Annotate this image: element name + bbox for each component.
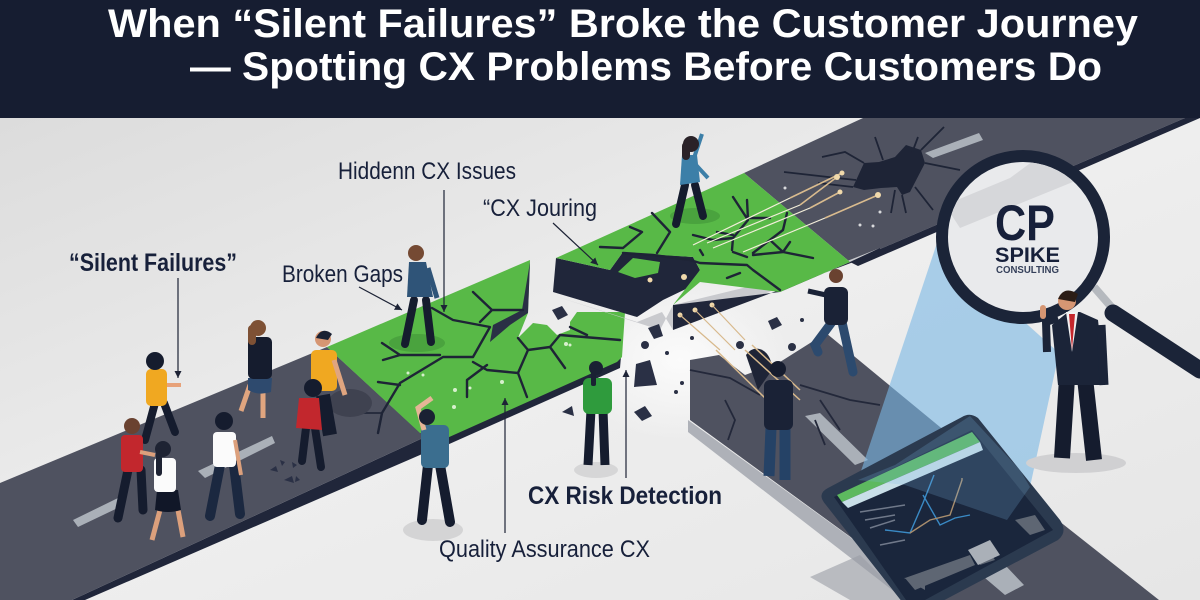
label: Quality Assurance CX: Quality Assurance CX	[439, 536, 650, 563]
person: white top navy trousers	[210, 412, 241, 516]
label: CX Jouring: “CX Jouring	[483, 195, 597, 222]
person: suited man	[1026, 290, 1126, 473]
logo text CP: CP	[995, 195, 1055, 251]
title line 1: When “Silent Failures” Broke the Customer Journey	[108, 2, 1139, 46]
road: left section	[0, 347, 450, 600]
tablet header bar	[837, 432, 980, 502]
logo text CONSULTING: CONSULTING	[996, 265, 1059, 276]
person: navy climbing	[808, 269, 853, 372]
label: CX Jouring	[483, 195, 598, 265]
logo text SPIKE: SPIKE	[995, 244, 1060, 267]
person: yellow shirt walker	[145, 352, 181, 440]
person: navy jacket on green	[389, 245, 445, 352]
road: lower right section	[688, 333, 1159, 600]
person: yellow shirt black trousers	[311, 331, 345, 435]
tablet	[810, 415, 1064, 600]
label: Hiddenn CX Issues: Hiddenn CX Issues	[338, 158, 516, 185]
label: Silent Failures: “Silent Failures”	[69, 249, 237, 277]
tablet chart	[885, 475, 970, 533]
dashboard beam	[858, 243, 1059, 520]
person: green shirt	[574, 361, 618, 478]
person: blue shirt arm raised	[403, 398, 463, 541]
person: blue top on upper green	[670, 134, 720, 224]
title banner	[0, 0, 1200, 118]
label: CX Risk Detection: CX Risk Detection	[528, 482, 722, 510]
road: upper right section with hole	[744, 118, 1200, 266]
green cracked section: left	[327, 260, 625, 445]
person: navy back view	[764, 361, 793, 480]
person: red shirt	[296, 379, 322, 467]
person: white shirt black skirt	[152, 441, 183, 540]
title line 2: — Spotting CX Problems Before Customers Do	[190, 45, 1102, 89]
person: black top blue skirt	[241, 320, 272, 418]
green cracked section: upper	[553, 170, 881, 350]
label: Broken Gaps	[282, 261, 403, 310]
magnifying glass	[942, 150, 1200, 370]
person: red shirt brown hair	[118, 418, 155, 518]
label: Broken Gaps: Broken Gaps	[282, 261, 403, 288]
rubble	[270, 306, 804, 483]
